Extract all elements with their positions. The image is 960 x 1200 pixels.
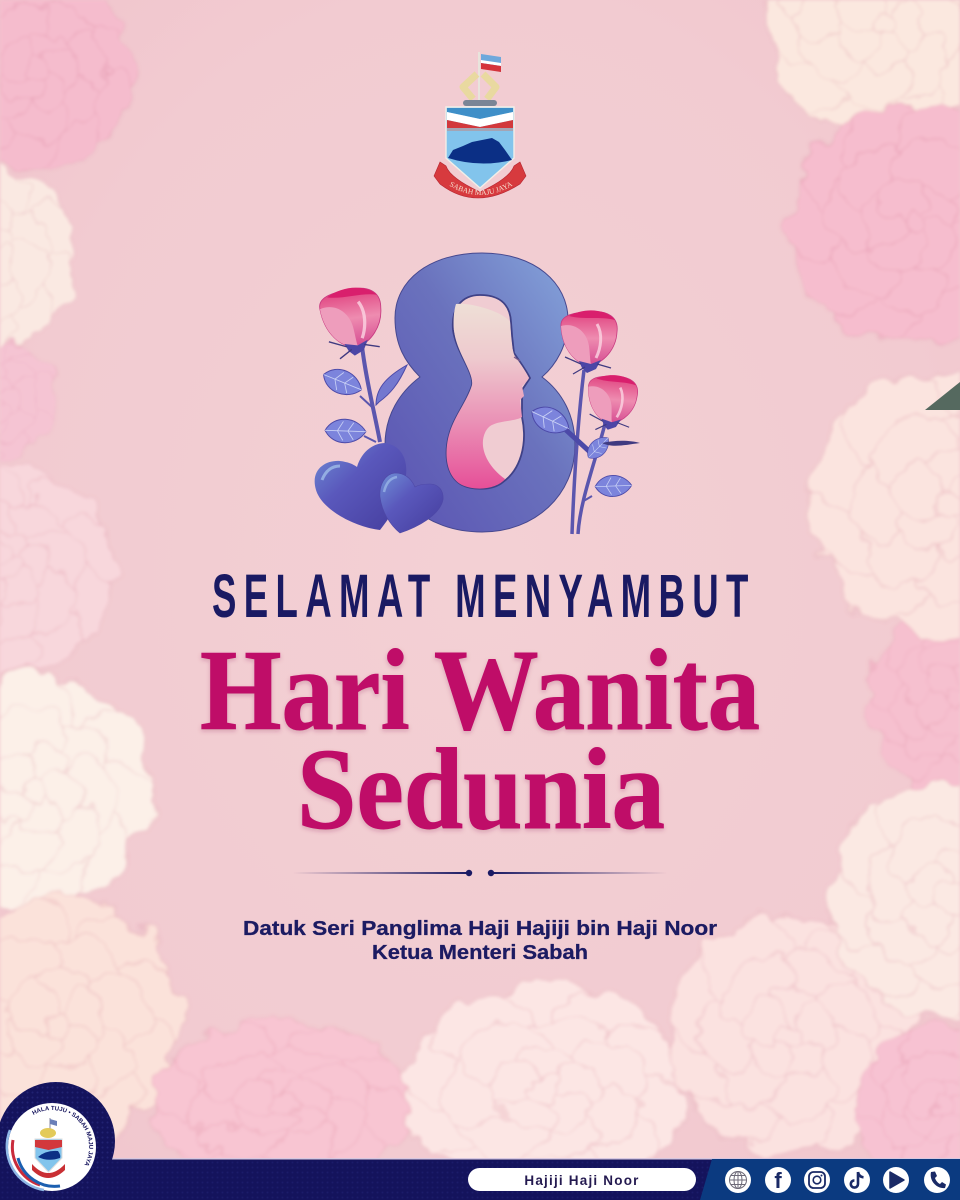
icon: small heart xyxy=(380,473,443,533)
silhouette of woman xyxy=(447,304,529,489)
icon: left rose xyxy=(318,284,387,361)
title: Hari Wanita Sedunia: Sedunia xyxy=(297,726,665,854)
name pill: Hajiji Haji Noor xyxy=(524,1173,640,1188)
icon: flag and hands xyxy=(463,52,501,106)
icon: small crest xyxy=(32,1118,65,1178)
right rose stems and leaves xyxy=(527,370,640,534)
icon: big heart xyxy=(315,443,406,530)
icon: globe xyxy=(725,1167,751,1193)
icon: facebook: f xyxy=(774,1168,782,1193)
left rose stems and leaves xyxy=(319,346,407,443)
crest: Sabah state arms xyxy=(434,52,526,198)
badge: Hala Tuju Sabah Maju Jaya xyxy=(0,1082,115,1198)
footer bar xyxy=(0,1158,960,1200)
text block: name and office: Ketua Menteri Sabah xyxy=(372,942,588,964)
text block: name and office xyxy=(243,918,717,964)
illustration: number 8 with woman silhouette, roses and hearts xyxy=(315,253,640,534)
heading: Selamat Menyambut: SELAMAT MENYAMBUT xyxy=(212,561,749,630)
icon: shield xyxy=(446,107,514,188)
icon: phone xyxy=(924,1167,950,1193)
number 8 xyxy=(385,253,575,532)
icon: instagram xyxy=(804,1167,830,1193)
text block: name and office: Datuk Seri Panglima Haji Hajiji bin Haji Noor xyxy=(243,918,717,940)
icon: tiktok xyxy=(844,1167,870,1193)
icon: facebook xyxy=(765,1167,791,1193)
icon: right lower rose xyxy=(585,373,639,433)
leaf at right edge xyxy=(925,382,960,410)
badge: Hala Tuju Sabah Maju Jaya: HALA TUJU • SABAH MAJU JAYA xyxy=(32,1106,94,1166)
icon: ribbon: SABAH MAJU JAYA xyxy=(450,182,513,195)
divider xyxy=(293,870,667,876)
title: Hari Wanita Sedunia xyxy=(200,627,760,854)
icon: play xyxy=(883,1167,909,1193)
icon: right upper rose xyxy=(561,310,617,374)
name pill xyxy=(468,1168,696,1191)
icon: ribbon xyxy=(434,162,526,198)
title: Hari Wanita Sedunia: Hari Wanita xyxy=(200,627,760,755)
